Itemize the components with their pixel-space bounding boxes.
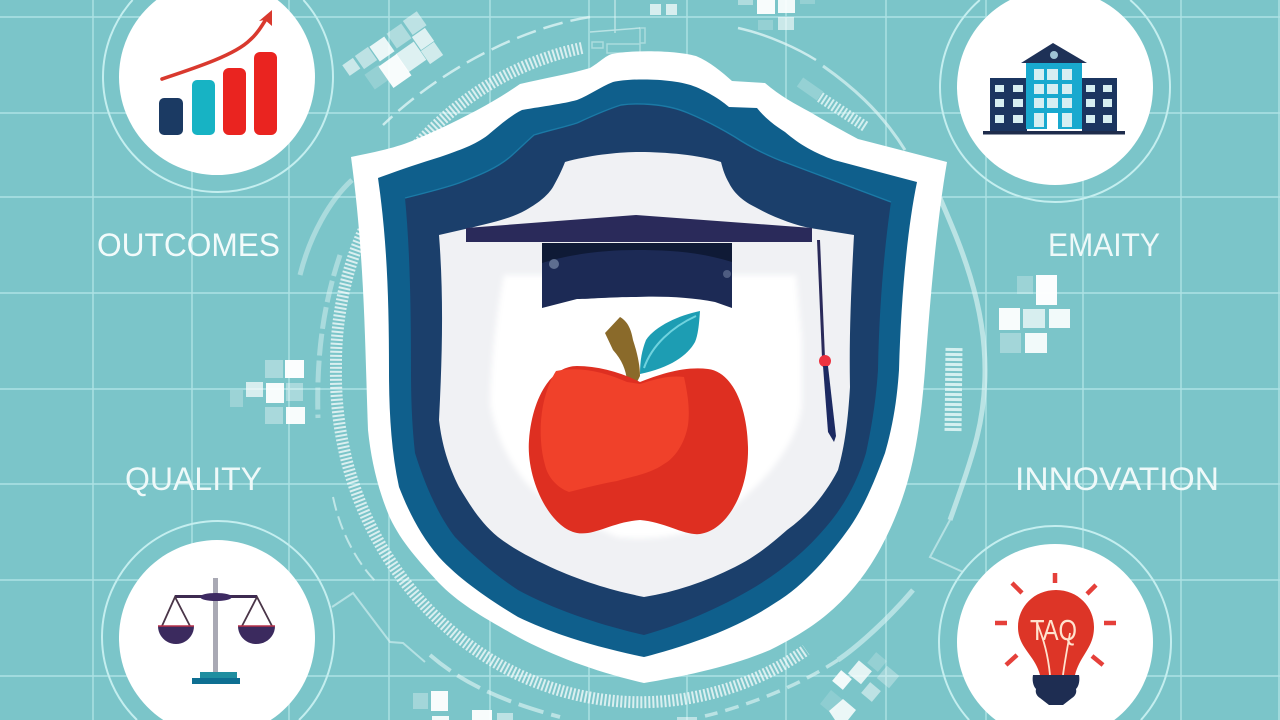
pixel squares: upper left [342,11,443,90]
panel: quality circle with scales [102,521,334,720]
icon: light bulb [995,573,1116,705]
tech ring decoration around shield [300,0,985,717]
icon: school building [983,43,1125,134]
icon: light bulb: TAQ [1030,615,1077,647]
pixel squares: bottom left [413,691,697,720]
pixel squares: bottom right [820,652,899,720]
pixel squares: middle right [999,275,1070,353]
label: innovation: INNOVATION [1015,461,1219,497]
icon: rising bar chart [159,10,277,135]
pixel squares: middle left [230,360,305,424]
label: outcomes: OUTCOMES [97,227,280,263]
icon: apple [529,311,748,534]
panel: innovation circle with light bulb [939,526,1171,720]
panel: outcomes circle with bar chart [103,0,333,192]
label: quality: QUALITY [125,461,262,497]
icon: balance scales [158,578,275,684]
panel: equity circle with building [940,0,1170,202]
label: equity: EMAITY [1048,227,1160,263]
shield inner panel [439,152,854,597]
pixel squares: top [650,0,815,30]
icon: graduation cap [466,215,836,442]
central shield [351,51,947,683]
